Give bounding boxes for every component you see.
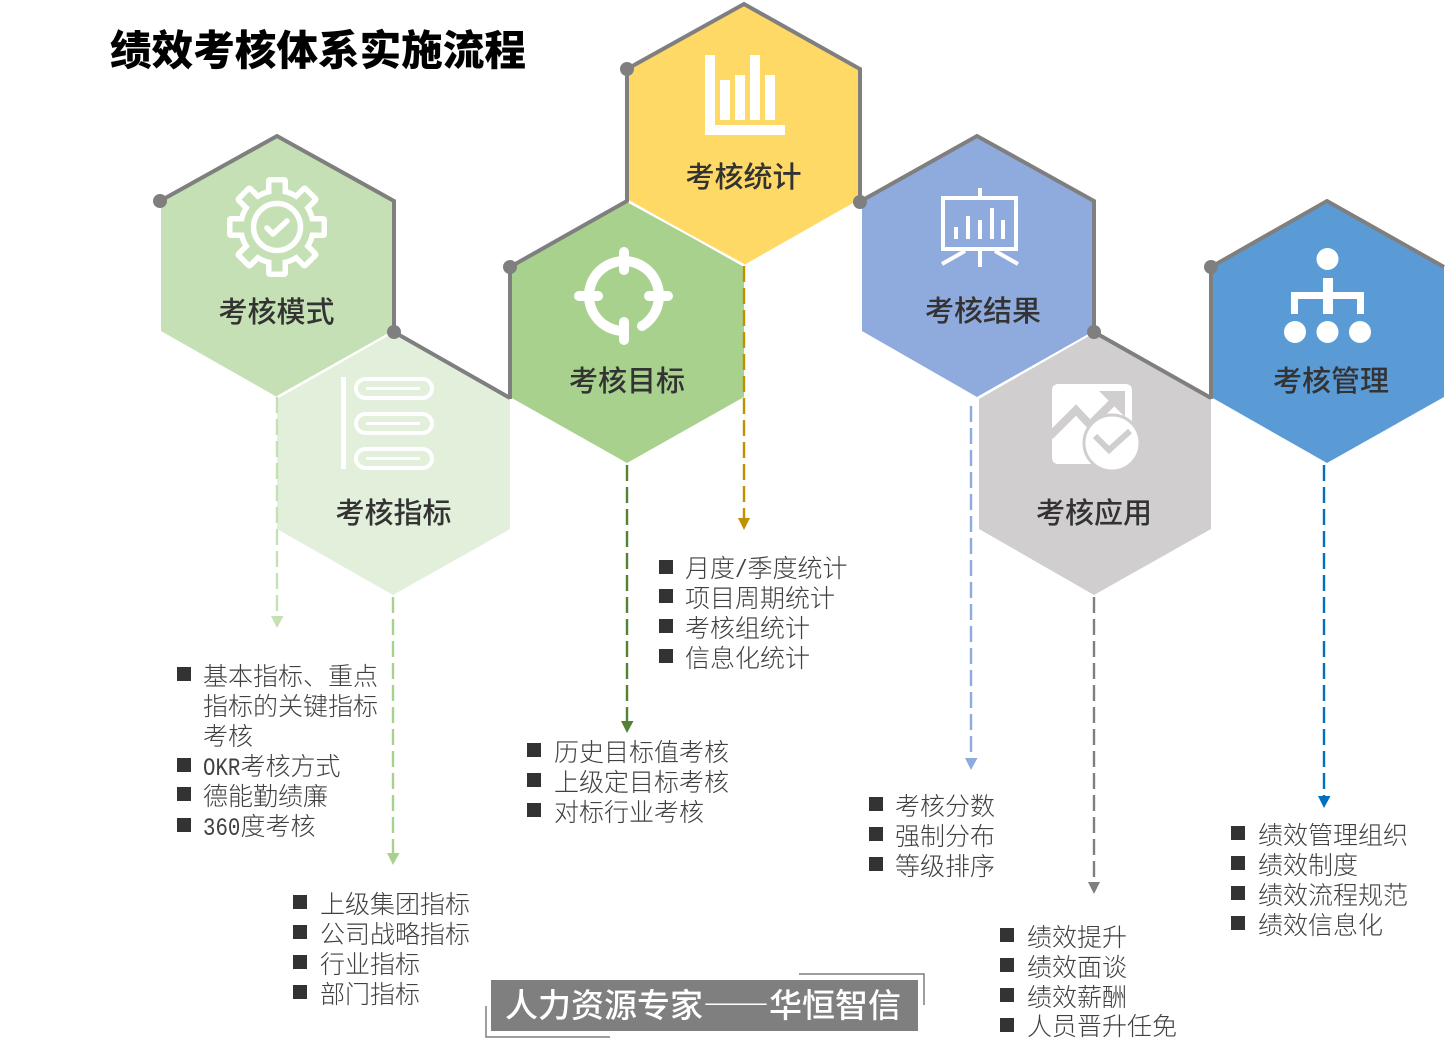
list: 考核指标: 行业指标 xyxy=(320,945,420,981)
list: 考核模式: 指标的关键指标 xyxy=(203,687,378,723)
list: 考核目标: 上级定目标考核 xyxy=(554,763,729,799)
arrow: 考核目标 xyxy=(621,465,634,733)
list: 考核结果: 强制分布 xyxy=(895,817,995,853)
list: 考核目标: 对标行业考核 xyxy=(554,793,704,829)
hexagon: 考核模式 xyxy=(161,135,394,397)
list: 考核指标: 上级集团指标 xyxy=(320,885,470,921)
arrow: 考核统计 xyxy=(738,266,750,530)
list: 考核模式: 考核方式 xyxy=(240,747,341,783)
icon: gear with check xyxy=(227,177,327,277)
list: 考核统计: 月度 xyxy=(685,549,735,585)
icon: bar chart xyxy=(705,55,785,135)
hexagon: 考核目标 xyxy=(510,201,744,463)
hexagon: 考核统计 xyxy=(627,3,860,265)
list: 考核管理: 绩效制度 xyxy=(1258,846,1358,882)
label: 考核应用: 考核应用 xyxy=(1036,490,1152,532)
banner: 人力资源专家——华恒智信 xyxy=(486,974,924,1037)
connector outline: left hexagons xyxy=(153,4,1444,399)
hexagon: 考核指标 xyxy=(277,333,510,595)
list: 考核结果: 等级排序 xyxy=(895,847,995,883)
list: 考核管理 xyxy=(1231,816,1408,942)
list: 考核结果 xyxy=(869,787,995,883)
hexagon: 考核管理 xyxy=(1211,201,1444,463)
list: 考核模式: 基本指标、重点 xyxy=(203,657,378,693)
list: 考核应用 xyxy=(1000,918,1177,1043)
arrow: 考核指标 xyxy=(387,597,400,865)
list: 考核模式: OKR xyxy=(203,754,241,783)
label: 考核指标: 考核指标 xyxy=(335,490,452,532)
hexagon: 考核结果 xyxy=(862,135,1094,397)
label: 考核统计: 考核统计 xyxy=(685,154,802,196)
list: 考核统计: 考核组统计 xyxy=(685,609,810,645)
icon: target xyxy=(579,252,668,340)
icon: list xyxy=(341,377,432,469)
list: 考核管理: 绩效流程规范 xyxy=(1258,876,1408,912)
list: 考核模式: 考核 xyxy=(203,717,253,753)
list: 考核管理: 绩效管理组织 xyxy=(1258,816,1408,852)
banner: 人力资源专家——华恒智信: 人力资源专家——华恒智信 xyxy=(505,979,901,1027)
title: 绩效考核体系实施流程 xyxy=(110,17,526,77)
list: 考核统计: 项目周期统计 xyxy=(685,579,835,615)
label: 考核模式: 考核模式 xyxy=(218,289,335,331)
list: 考核应用: 人员晋升任免 xyxy=(1027,1007,1177,1043)
list: 考核统计: 信息化统计 xyxy=(685,639,810,675)
list: 考核指标 xyxy=(293,885,470,1011)
arrow: 考核应用 xyxy=(1088,597,1100,894)
list: 考核指标: 部门指标 xyxy=(320,975,420,1011)
icon: org chart xyxy=(1284,248,1371,343)
arrow: 考核模式 xyxy=(271,397,284,628)
icon: presentation board xyxy=(942,188,1018,267)
list: 考核模式: 度考核 xyxy=(240,807,316,843)
label: 考核管理: 考核管理 xyxy=(1273,358,1389,400)
list: 考核应用: 绩效薪酬 xyxy=(1027,978,1127,1014)
arrow: 考核结果 xyxy=(965,406,978,770)
hexagon: 考核应用 xyxy=(979,333,1211,595)
list: 考核目标: 历史目标值考核 xyxy=(554,733,729,769)
list: 考核统计 xyxy=(659,549,848,675)
list: 考核目标 xyxy=(527,733,729,829)
list: 考核应用: 绩效面谈 xyxy=(1027,948,1127,984)
label: 考核目标: 考核目标 xyxy=(569,358,685,400)
list: 考核应用: 绩效提升 xyxy=(1027,918,1127,954)
label: 考核结果: 考核结果 xyxy=(925,288,1041,330)
list: 考核管理: 绩效信息化 xyxy=(1258,906,1383,942)
list: 考核统计: / xyxy=(735,556,747,585)
list: 考核模式: 360 xyxy=(203,814,240,843)
list: 考核结果: 考核分数 xyxy=(895,787,995,823)
list: 考核模式 xyxy=(177,657,378,843)
arrow: 考核管理 xyxy=(1318,465,1330,808)
icon: growth with check xyxy=(1050,384,1140,471)
list: 考核统计: 季度统计 xyxy=(748,549,848,585)
list: 考核模式: 德能勤绩廉 xyxy=(203,777,328,813)
list: 考核指标: 公司战略指标 xyxy=(320,915,470,951)
